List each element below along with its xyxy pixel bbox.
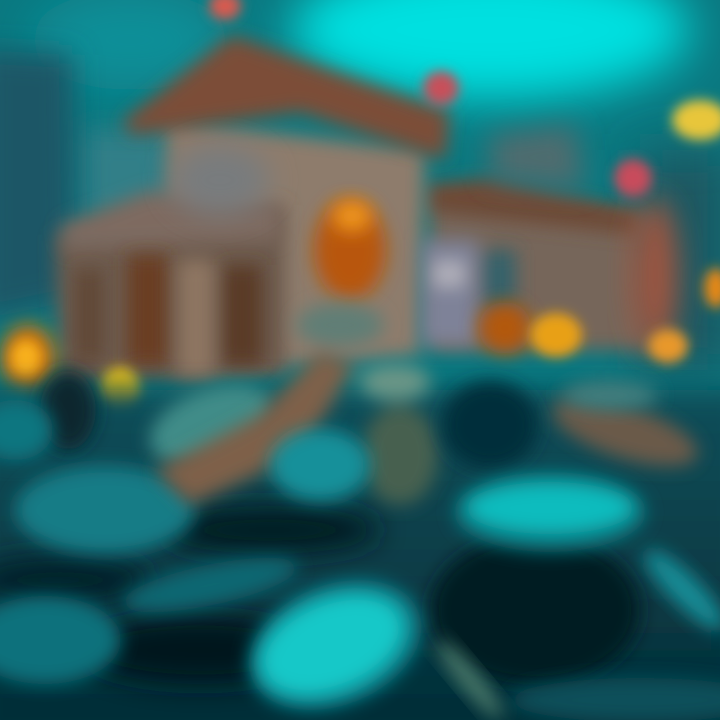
building: central facade xyxy=(122,35,450,375)
coins: left stack xyxy=(0,369,302,684)
building: right wing xyxy=(425,125,679,353)
roof ornaments: red finials xyxy=(209,0,652,197)
coins: centre and right stack xyxy=(270,380,720,720)
lights: glowing lamps xyxy=(0,100,720,413)
door: orange archway xyxy=(314,200,386,300)
building: left wing with columns xyxy=(55,145,285,385)
sign: grey-blue panel xyxy=(422,240,516,345)
foreground: dark base xyxy=(0,370,720,720)
hand: brown blurred hand xyxy=(155,303,438,505)
coin: bright foreground coin xyxy=(229,556,510,720)
building: left tower xyxy=(0,50,75,320)
